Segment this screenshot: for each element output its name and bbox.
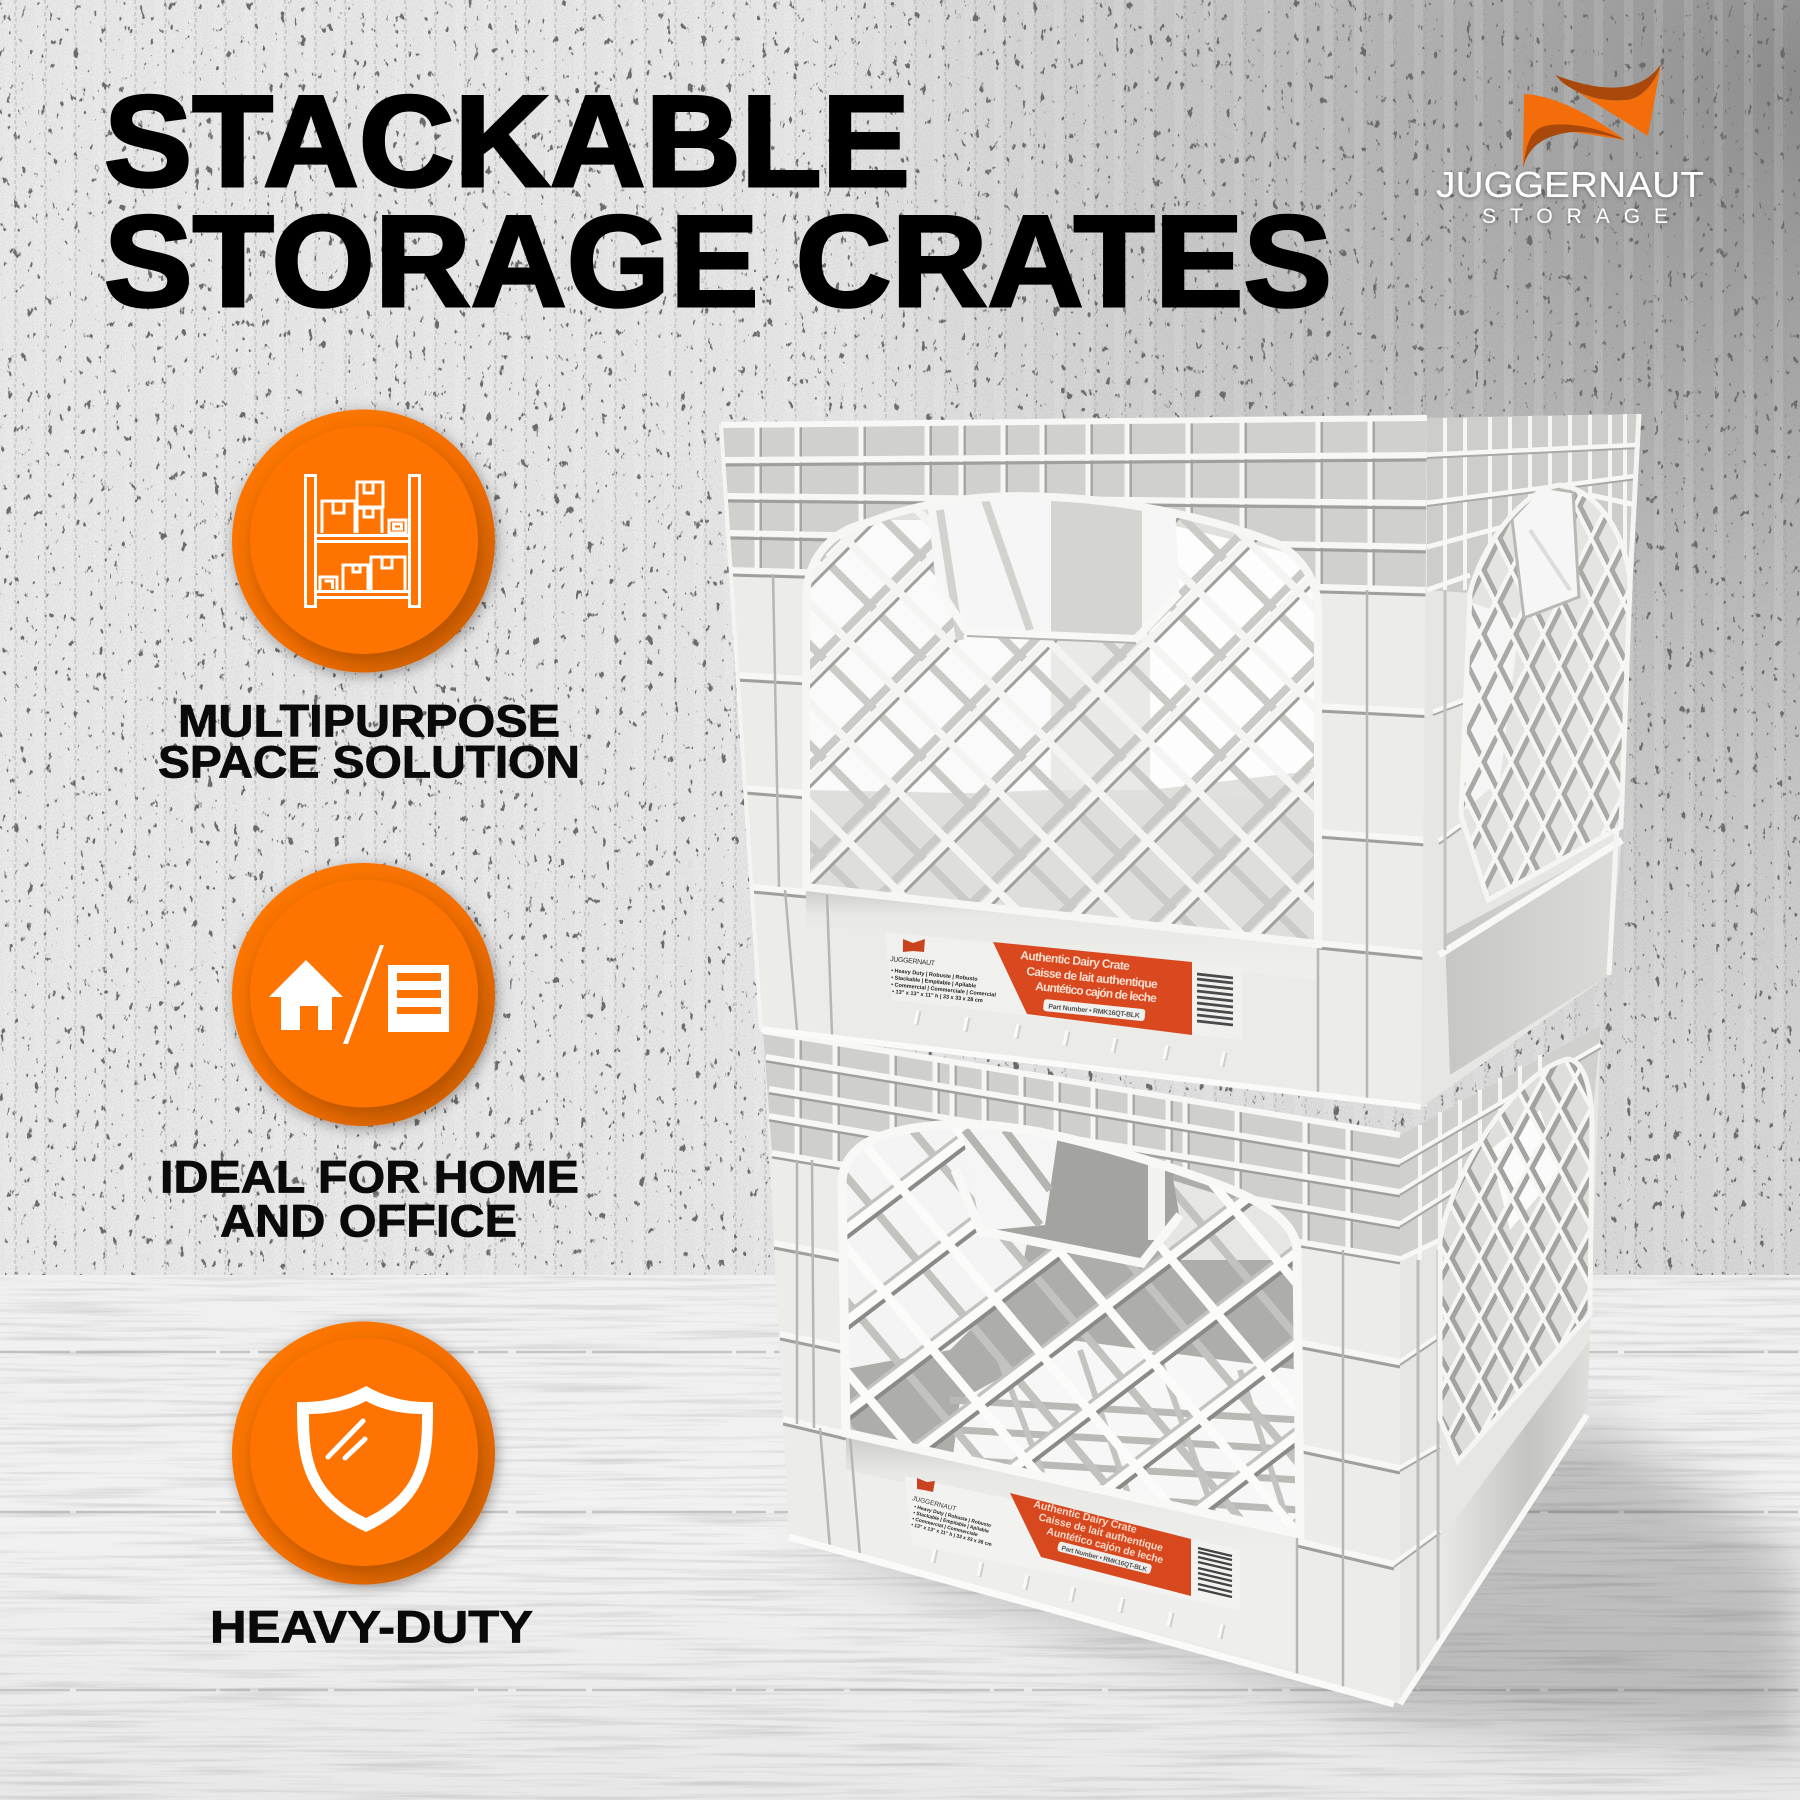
logo: Juggernaut Storage: STORAGE — [1482, 205, 1668, 228]
top crate right window rim — [1461, 485, 1630, 900]
bottom crate window and lattice — [846, 1128, 1296, 1528]
bottom crate orange sticker — [1010, 1493, 1191, 1596]
top crate barcode — [1197, 974, 1233, 1025]
label: multipurpose space solution — [158, 696, 580, 788]
label: ideal for home and office: AND OFFICE — [220, 1196, 517, 1246]
bottom crate label card: • Heavy Duty | Robuste | Robusto — [914, 1504, 992, 1529]
bottom crate right window lattice — [1442, 1062, 1590, 1456]
bottom crate label card: • 13" x 13" x 11" h | 33 x 33 x 28 cm — [911, 1522, 993, 1548]
icon: house slash document — [269, 945, 449, 1044]
top crate label card: • Commercial | Commerciale | Comercial — [891, 982, 997, 999]
bottom crate window rim — [842, 1124, 1300, 1534]
icon: shelf with boxes — [306, 476, 420, 606]
title: STORAGE CRATES — [104, 188, 1332, 334]
title — [104, 68, 1332, 334]
badge: multipurpose — [232, 410, 495, 672]
label: multipurpose space solution: SPACE SOLUTION — [158, 736, 580, 788]
top crate window and lattice — [810, 501, 1314, 940]
logo: Juggernaut Storage: JUGGERNAUT — [1436, 164, 1704, 205]
bottom crate right window rim — [1440, 1059, 1592, 1461]
bottom crate right face — [1394, 1025, 1601, 1704]
top crate label card: • Heavy Duty | Robuste | Robusto — [891, 968, 978, 983]
bottom crate label card: Caisse de lait authentique — [1037, 1511, 1164, 1554]
top crate window rim — [806, 496, 1318, 944]
label: heavy-duty: HEAVY-DUTY — [210, 1602, 533, 1652]
title: STACKABLE — [104, 68, 910, 214]
bottom crate label card: Auntético cajón de leche — [1045, 1525, 1165, 1566]
icon: shield — [297, 1386, 433, 1532]
bottom crate label card: • Stackable | Empilable | Apilable — [913, 1510, 990, 1535]
badge: heavy duty — [232, 1322, 495, 1584]
crate floor shadow — [790, 1420, 1800, 1750]
bottom crate label card: JUGGERNAUT — [912, 1495, 957, 1513]
top crate label card: Caisse de lait authentique — [1026, 964, 1159, 991]
top crate label card: Authentic Dairy Crate — [1020, 948, 1131, 973]
label: ideal for home and office — [160, 1152, 579, 1246]
logo: Juggernaut Storage — [1436, 64, 1704, 228]
top crate right face — [1421, 414, 1640, 1107]
bottom crate label card — [905, 1476, 1240, 1610]
bottom crate barcode — [1198, 1548, 1232, 1597]
bottom crate logo flag — [917, 1478, 935, 1492]
top crate label card: Auntético cajón de leche — [1035, 979, 1158, 1005]
top crate front face — [721, 418, 1439, 1107]
top crate part number — [1043, 999, 1146, 1021]
label: multipurpose space solution: MULTIPURPOSE — [178, 696, 560, 746]
top crate right window lattice — [1464, 488, 1628, 896]
background: wooden floor — [0, 1275, 1800, 1800]
bottom crate label card: • Commercial | Commerciale — [912, 1516, 979, 1538]
label: ideal for home and office: IDEAL FOR HOME — [160, 1152, 579, 1202]
top crate label card: • 13" x 13" x 11" h | 33 x 33 x 28 cm — [892, 989, 983, 1004]
bottom crate front face — [763, 1031, 1400, 1704]
top crate label card: JUGGERNAUT — [890, 956, 936, 968]
crate: top — [719, 414, 1642, 1110]
bottom crate label card: Authentic Dairy Crate — [1032, 1498, 1138, 1536]
top crate part number: Part Number • RMK16QT-BLK — [1048, 1003, 1140, 1020]
top crate label card: • Stackable | Empilable | Apilable — [891, 975, 976, 990]
crate: bottom — [762, 1025, 1602, 1708]
background: concrete wall — [0, 0, 1800, 1276]
top crate logo flag — [903, 939, 925, 952]
bottom crate part number: Part Number • RMK16QT-BLK — [1061, 1545, 1148, 1573]
top crate label card — [885, 932, 1242, 1040]
badge: home and office — [232, 863, 495, 1126]
top crate orange sticker — [993, 942, 1192, 1035]
